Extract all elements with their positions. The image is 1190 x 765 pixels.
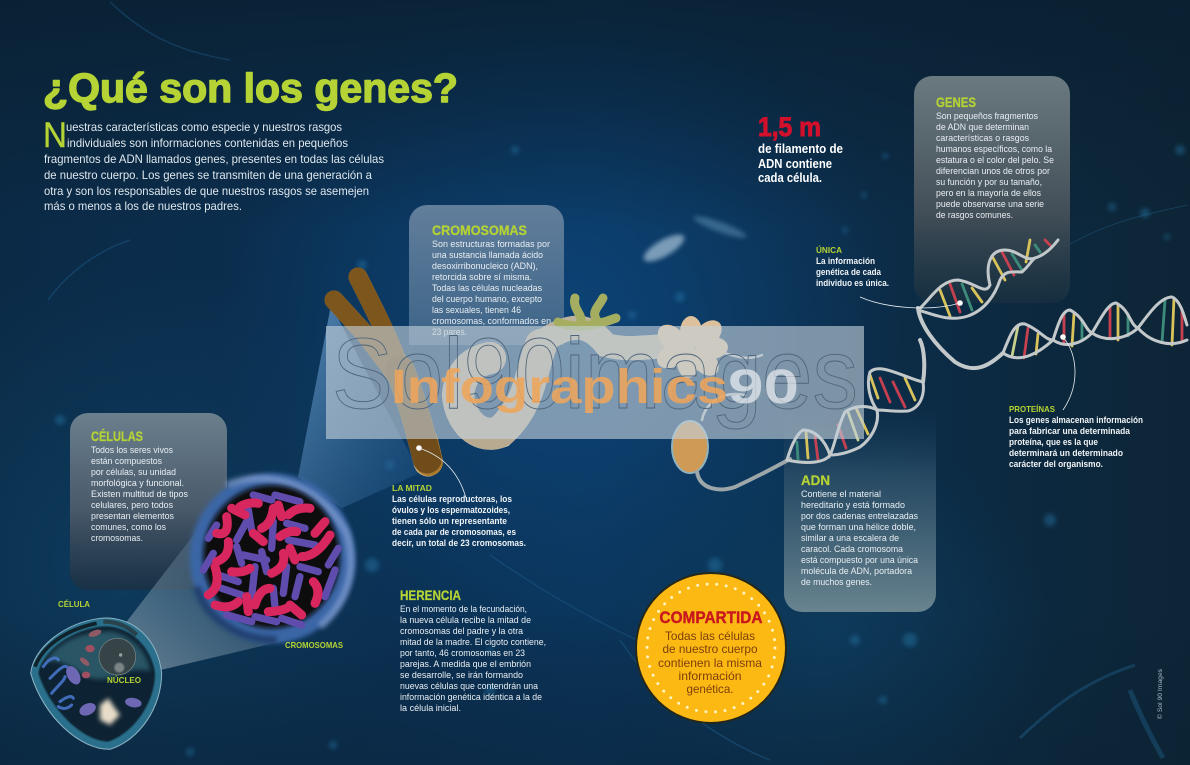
text block: herencia: parejas. A medida que el embrión (400, 659, 531, 670)
text: cromosomas (432, 239, 551, 338)
callout: compartida badge: Todas las células (665, 629, 755, 643)
intro text block: fragmentos de ADN llamados genes, presentes en todas las células (44, 152, 384, 166)
text block: herencia: mitad de la madre. El cigoto contiene, (400, 637, 546, 648)
callout: proteínas: determinará un determinado (1009, 448, 1123, 459)
callout: la mitad: decir, un total de 23 cromosomas. (392, 538, 526, 549)
callout: proteínas: PROTEÍNAS (1009, 404, 1055, 414)
intro text block (43, 116, 384, 213)
callout: única: ÚNICA (816, 244, 842, 255)
callout: única: La información (816, 256, 875, 267)
text block: herencia: En el momento de la fecundación, (400, 604, 527, 615)
text: células: por células, su unidad (91, 467, 176, 478)
callout: la mitad: Las células reproductoras, los (392, 494, 512, 505)
green coiled tip (558, 298, 616, 326)
callout: proteínas: proteína, que es la que (1009, 437, 1098, 448)
zoom cone: chromosome to nucleus (298, 305, 420, 508)
illustration: chromosome and chromatin fibre (334, 277, 790, 489)
intro text block: de nuestro cuerpo. Los genes se transmiten de una generación a (44, 168, 372, 182)
intro text block: más o menos a los de nuestros padres. (44, 199, 242, 213)
text: cromosomas: Todas las células nucleadas (432, 283, 542, 294)
fact: 1,5 m: cada célula. (758, 171, 822, 185)
text: adn: caracol. Cada cromosoma (801, 544, 904, 555)
watermark: Infographics (391, 361, 728, 414)
linker thread (697, 459, 790, 489)
heading: adn: ADN (801, 472, 830, 488)
text: genes: estatura o el color del pelo. Se (936, 155, 1054, 166)
intro text block: otra y son los responsables de que nuestros rasgos se asemejen (44, 184, 369, 198)
text: adn: está compuesto por una única (801, 555, 919, 566)
credit: © Sol 90 Images (1156, 668, 1164, 719)
callout: la mitad: tienen sólo un representante (392, 516, 507, 527)
text: células: comunes, como los (91, 522, 166, 533)
intro text block: individuales son informaciones contenidas en pequeños (67, 136, 348, 150)
callout: la mitad: LA MITAD (392, 483, 432, 493)
callout: la mitad: óvulos y los espermatozoides, (392, 505, 510, 516)
panel: genes (914, 76, 1070, 303)
callout: la mitad: de cada par de cromosomas, es (392, 527, 516, 538)
label: núcleo: NÚCLEO (107, 674, 141, 685)
text: adn: Contiene el material (801, 489, 881, 500)
text block: herencia: por tanto, 46 cromosomas en 23 (400, 648, 525, 659)
text: cromosomas: una sustancia llamada ácido (432, 250, 543, 261)
text: genes: puede observarse una serie (936, 199, 1044, 210)
fact: 1,5 m (758, 112, 843, 185)
text: adn: molécula de ADN, portadora (801, 566, 913, 577)
panel: cromosomas (409, 205, 564, 345)
text: células (91, 445, 188, 544)
callout: compartida badge: contienen la misma (658, 656, 762, 670)
text block: herencia: cromosomas del padre y la otra (400, 626, 524, 637)
text: adn (801, 489, 919, 588)
text block: herencia: información genética idéntica a la de (400, 692, 542, 703)
watermark: Sol90images (332, 318, 858, 430)
text block: herencia: la nueva célula recibe la mitad de (400, 615, 531, 626)
fact: 1,5 m: ADN contiene (758, 157, 832, 171)
text: células: Todos los seres vivos (91, 445, 173, 456)
callout: proteínas (1009, 334, 1143, 470)
text: cromosomas: cromosomas, conformados en (432, 316, 551, 327)
text: genes: humanos específicos, como la (936, 144, 1053, 155)
text: genes: su función y por su tamaño, (936, 177, 1042, 188)
text block: herencia (400, 587, 546, 714)
callout: compartida badge (636, 573, 786, 723)
text: genes (936, 111, 1054, 221)
label: cromosomas: CROMOSOMAS (285, 640, 343, 650)
heading: células: CÉLULAS (91, 428, 143, 444)
text block: herencia: la célula inicial. (400, 703, 461, 714)
text: adn: similar a una escalera de (801, 533, 899, 544)
panel: adn (784, 400, 936, 612)
strands (787, 240, 1187, 462)
text: cromosomas: 23 pares. (432, 327, 467, 338)
callout: única (816, 244, 963, 308)
title: ¿Qué son los genes? (43, 65, 458, 111)
callout: proteínas: Los genes almacenan información (1009, 415, 1143, 426)
text: adn: por dos cadenas entrelazadas (801, 511, 918, 522)
heading: cromosomas: CROMOSOMAS (432, 222, 527, 238)
label: célula: CÉLULA (58, 599, 90, 609)
text: adn: hereditario y está formado (801, 500, 905, 511)
text: genes: pero en la mayoría de ellos (936, 188, 1041, 199)
callout: compartida badge: información (678, 669, 742, 683)
text block: herencia: se desarrolle, se irán formando (400, 670, 523, 681)
watermark: 90 (728, 361, 799, 414)
zoom cone: nucleus to chromosomes (107, 523, 287, 673)
intro text block: uestras características como especie y nuestros rasgos (66, 120, 342, 134)
text block: herencia: HERENCIA (400, 587, 461, 603)
text: células: morfológica y funcional. (91, 478, 184, 489)
text: genes: diferencian unos de otros por (936, 166, 1050, 177)
illustration: cell (31, 618, 162, 749)
flower-like coil (653, 315, 729, 381)
illustration: DNA double helix (787, 240, 1187, 462)
text: cromosomas: del cuerpo humano, excepto (432, 294, 542, 305)
fact: 1,5 m: de filamento de (758, 142, 843, 156)
panel: células (70, 413, 227, 590)
intro text block: N (43, 116, 67, 155)
callout: única: genética de cada (816, 267, 882, 278)
bead (672, 421, 708, 473)
callout: compartida badge: de nuestro cuerpo (662, 642, 758, 656)
text: cromosomas: retorcida sobre sí misma. (432, 272, 532, 283)
callout: compartida badge: COMPARTIDA (660, 608, 762, 627)
text: cromosomas: Son estructuras formadas por (432, 239, 550, 250)
illustration: nucleus with chromosomes (190, 473, 355, 643)
text: cromosomas: las sexuales, tienen 46 (432, 305, 521, 316)
text: células: están compuestos (91, 456, 162, 467)
text: cromosomas: desoxirribonucleico (ADN), (432, 261, 538, 272)
text: genes: de ADN que determinan (936, 122, 1029, 133)
text: células: celulares, pero todos (91, 500, 173, 511)
heading: genes: GENES (936, 94, 976, 110)
text block: herencia: nuevas células que contendrán una (400, 681, 539, 692)
callout: compartida badge: genética. (686, 682, 734, 696)
fact: 1,5 m: 1,5 m (758, 112, 821, 142)
text: adn: que forman una hélice doble, (801, 522, 916, 533)
text: células: cromosomas. (91, 533, 143, 544)
text: adn: de muchos genes. (801, 577, 872, 588)
callout: única: individuo es única. (816, 278, 889, 289)
callout: proteínas: carácter del organismo. (1009, 459, 1103, 470)
rungs (797, 240, 1182, 460)
callout: la mitad (392, 445, 526, 549)
text: genes: de rasgos comunes. (936, 210, 1013, 221)
text: células: Existen multitud de tipos (91, 489, 188, 500)
callout: proteínas: para fabricar una determinada (1009, 426, 1131, 437)
text: genes: características o rasgos (936, 133, 1029, 144)
text: células: presentan elementos (91, 511, 174, 522)
text: genes: Son pequeños fragmentos (936, 111, 1038, 122)
